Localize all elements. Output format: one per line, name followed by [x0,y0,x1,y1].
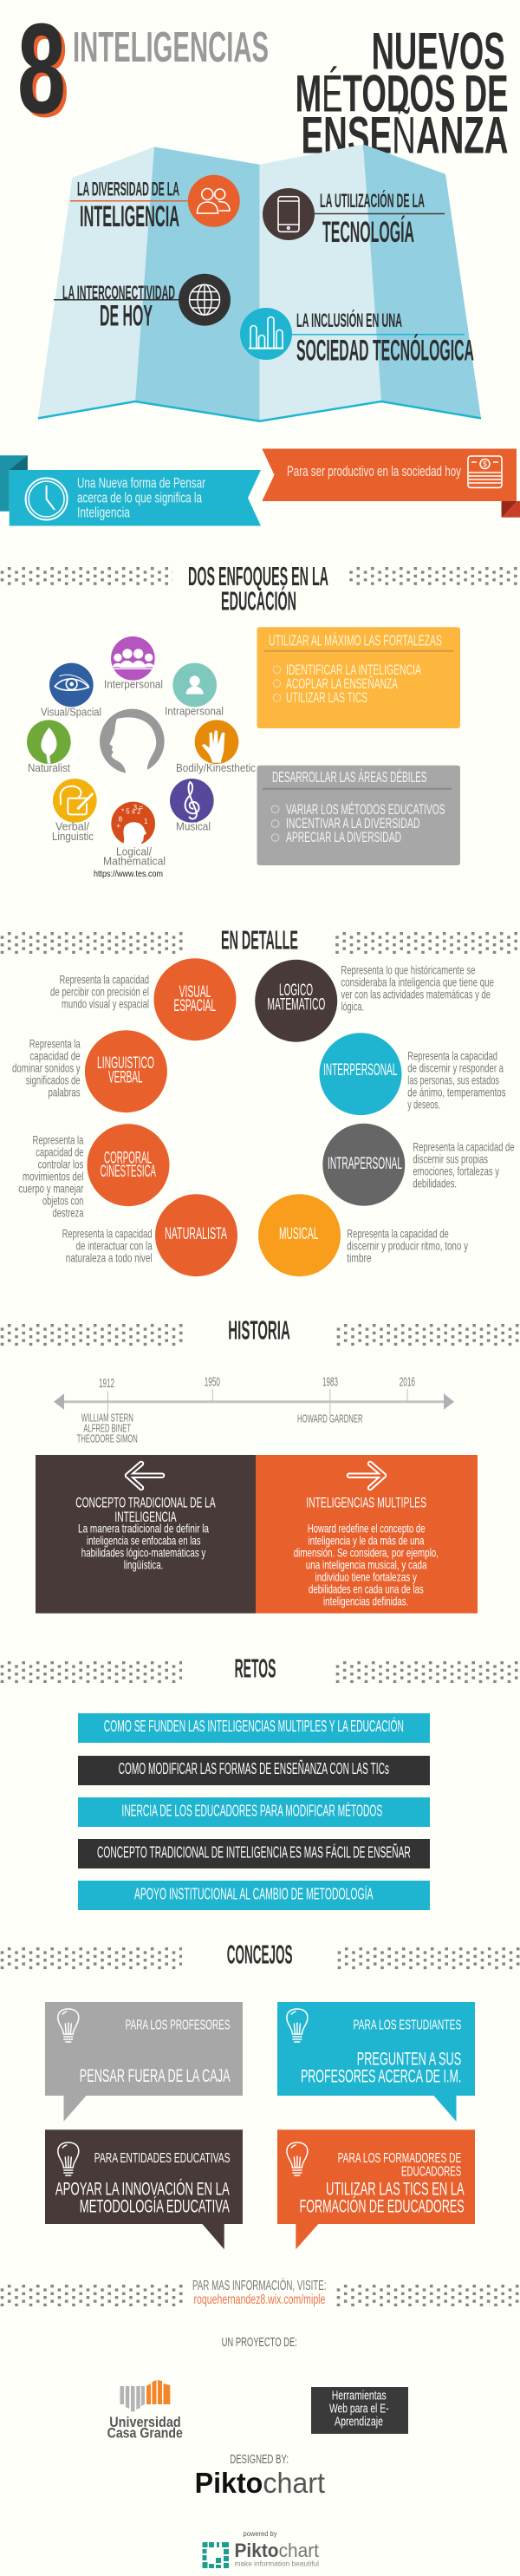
icon: bulb [287,2142,308,2175]
wheel labels: Bodily/Kinesthetic [176,761,256,774]
map item: la interconectividad de hoy: LA INTERCONECTIVIDAD [62,282,175,303]
icon: right arrow [349,1464,384,1488]
panel: inteligencias multiples: inteligencia y le da más de una [309,1533,425,1547]
wheel labels: Musical [176,820,211,833]
wheel labels: Naturalist [28,761,70,774]
section heading: historia [0,1314,520,1346]
panel: inteligencias multiples: individuo tiene fortalezas y [315,1569,417,1583]
text: designed by: DESIGNED BY: [230,2452,289,2467]
intelligence: corporal cinestesica: objetos con [42,1194,83,1208]
intelligence: linguistico verbal: significados de [26,1073,81,1087]
intelligence: musical: discernir y producir ritmo, tono y [347,1239,468,1253]
callout: para los profesores: PARA LOS PROFESORES [126,2018,231,2033]
map item: la diversidad de la inteligencia: INTELIGENCIA [80,200,179,233]
wheel labels [28,677,256,868]
logo: powered by piktochart: powered by [243,2530,277,2538]
intelligence: linguistico verbal: VERBAL [108,1068,142,1086]
section heading: en detalle: EN DETALLE [221,924,298,955]
panel: inteligencias multiples: debilidades en cada una de las [309,1581,424,1595]
intelligence: corporal cinestesica: controlar los [38,1158,83,1171]
icon: musical [170,779,214,823]
icon: left arrow [127,1464,162,1488]
panel: desarrollar las áreas débiles [257,766,460,865]
icon: visual spatial [49,663,94,707]
timeline: WILLIAM STERN [81,1412,133,1425]
icon: bodily [195,720,238,764]
challenge bar 5 [78,1881,430,1910]
intelligence: linguistico verbal: LINGUISTICO [97,1054,154,1073]
ribbon: una nueva forma de pensar [0,455,261,525]
intelligence: logico matematico: LOGICO [279,981,313,1000]
panel: utilizar al máximo las fortalezas: UTILIZAR LAS TICS [286,689,367,706]
folded map illustration [38,144,481,421]
intelligence: musical: MUSICAL [279,1225,318,1243]
intelligence: naturalista: Representa la capacidad [62,1227,153,1241]
logo: universidad casa grande: Universidad [109,2414,181,2430]
wheel labels: Linguistic [52,830,94,843]
panel: herramientas web para el e-aprendizaje: Herramientas [332,2388,387,2403]
wheel labels: Interpersonal [104,677,163,690]
icon: piktochart mark [203,2542,229,2568]
logo: powered by piktochart: make information beautiful [234,2560,319,2567]
text: un proyecto de: UN PROYECTO DE: [222,2335,297,2350]
footer: more information: roquehernandez8.wix.com/miple [194,2292,325,2307]
ribbon: una nueva forma de pensar: Una Nueva forma de Pensar [77,475,205,491]
panel: concepto tradicional: La manera tradicional de definir la [78,1521,209,1535]
callout: para entidades educativas: APOYAR LA INNOVACIÓN EN LA [55,2178,230,2200]
icon: logical [111,802,155,846]
icon: interpersonal [111,636,155,681]
timeline: 1950 [205,1375,220,1389]
ribbon: una nueva forma de pensar: Inteligencia [77,505,131,520]
wheel labels: Visual/Spacial [41,705,101,718]
panel: herramientas web para el e-aprendizaje: Aprendizaje [335,2414,383,2429]
wheel labels: Intrapersonal [165,705,224,718]
panel: concepto tradicional: CONCEPTO TRADICIONAL DE LA [75,1496,216,1511]
icon: banknote: $ [483,460,487,468]
callout: para entidades educativas: PARA ENTIDADES EDUCATIVAS [94,2151,231,2166]
panel: herramientas web para el e-aprendizaje: Web para el E- [329,2401,388,2416]
timeline [54,1375,454,1445]
callout: para los formadores de educadores [277,2129,475,2249]
panel: utilizar al máximo las fortalezas: ACOPLAR LA ENSEÑANZA [286,675,398,692]
panel: concepto tradicional: INTELIGENCIA [114,1510,177,1525]
timeline: 1912 [99,1377,114,1391]
timeline: THEODORE SIMON [77,1432,138,1445]
logo: piktochart: Piktochart [195,2467,325,2499]
panel: herramientas web para el e-aprendizaje [311,2387,408,2434]
callout: para los estudiantes: PARA LOS ESTUDIANTES [354,2018,461,2033]
intelligence: corporal cinestesica: destreza [52,1206,84,1220]
panel: concepto tradicional: habilidades lógico-matemáticas y [81,1545,205,1559]
intelligence: visual espacial: de percibir con precisión el [50,984,149,998]
wheel labels: Mathematical [103,855,166,868]
map item: la utilización de la tecnología: TECNOLOGÍA [322,214,414,249]
intelligence: musical: timbre [347,1251,372,1265]
intelligence: linguistico verbal: capacidad de [29,1049,81,1063]
icon: logical: 1 [144,818,148,825]
intelligence: naturalista [62,1194,237,1276]
intelligence: logico matematico [255,960,494,1042]
icon: bars [240,308,292,360]
panel: inteligencias multiples: una inteligencia musical, y cada [306,1557,427,1571]
panel: utilizar al máximo las fortalezas [257,627,460,728]
intelligence: logico matematico: lógica. [341,1000,364,1014]
intelligence: visual espacial: Representa la capacidad [59,972,149,986]
callout: para entidades educativas [45,2129,243,2249]
icon: globe [179,274,231,326]
intelligence: intrapersonal [322,1124,515,1206]
panel: inteligencias multiples: dimensión. Se considera, por ejemplo, [294,1545,439,1559]
intelligence: visual espacial: ESPACIAL [173,997,216,1015]
intelligence: naturalista: naturaleza a todo nivel [66,1251,153,1265]
section heading: concejos [0,1939,520,1970]
icon: intrapersonal [172,663,217,707]
icon: head [100,709,165,776]
footer: more information: PAR MAS INFORMACIÓN, VISITE: [192,2279,326,2293]
icon: logical: 8 [119,815,123,823]
logo: powered by piktochart [203,2530,319,2568]
challenge bar 2 [78,1756,430,1785]
intelligence: interpersonal [319,1033,506,1115]
intelligence: interpersonal: y deseos. [407,1098,440,1112]
map item: la interconectividad de hoy: DE HOY [100,300,153,333]
intelligence: corporal cinestesica: capacidad de [36,1145,84,1159]
title: 8 inteligencias [17,0,269,144]
intelligence: visual espacial [50,958,236,1040]
panel: concepto tradicional: lingüística. [124,1557,163,1571]
section heading: en detalle [0,924,520,955]
panel: desarrollar las áreas débiles: APRECIAR LA DIVERSIDAD [286,829,401,845]
icon: clock [26,479,68,520]
intelligence: linguistico verbal [12,1030,167,1112]
footer: more information [0,2279,520,2307]
intelligence: corporal cinestesica: cuerpo y manejar [18,1182,84,1196]
panel: concepto tradicional: inteligencia se enfocaba en las [87,1533,201,1547]
intelligence: musical: Representa la capacidad de [347,1227,449,1241]
callout: para los profesores: PENSAR FUERA DE LA CAJA [80,2065,231,2086]
map item: la utilización de la tecnología [263,188,445,249]
section heading: dos enfoques en la educación: EDUCACIÓN [221,584,296,616]
intelligence: linguistico verbal: palabras [49,1086,81,1099]
numeral 8 with orange shadow: 8 [17,0,66,140]
callout: para entidades educativas: METODOLOGÍA EDUCATIVA [80,2195,230,2217]
map item: la interconectividad de hoy [54,274,231,333]
ribbon: una nueva forma de pensar: acerca de lo que significa la [77,491,203,506]
panel: desarrollar las áreas débiles: INCENTIVAR A LA DIVERSIDAD [286,815,419,831]
section heading: retos: RETOS [235,1653,276,1683]
callout: para los profesores [45,2002,243,2122]
panel: inteligencias multiples [256,1455,478,1614]
challenge bar 3 [78,1797,430,1827]
panel: concepto tradicional [36,1455,256,1614]
icon: naturalist [27,720,71,764]
intelligence: naturalista: de interactuar con la [76,1239,153,1253]
intelligence: linguistico verbal: dominar sonidos y [12,1061,81,1075]
timeline: ALFRED BINET [83,1422,131,1435]
logo: powered by piktochart: Piktochart [234,2540,319,2561]
panel: inteligencias multiples: INTELIGENCIAS MULTIPLES [306,1496,426,1511]
challenge bar 1 [78,1713,430,1743]
callout: para los estudiantes [277,2002,475,2122]
title: nuevos métodos de enseñanza [296,23,509,164]
map item: la inclusión en una sociedad tecnológica: LA INCLUSIÓN EN UNA [296,310,402,331]
intelligence: naturalista: NATURALISTA [165,1225,227,1243]
intelligence: musical [258,1194,468,1276]
callout: para los formadores de educadores: EDUCADORES [401,2164,461,2179]
logo: universidad casa grande: Casa Grande [107,2425,183,2442]
wheel labels: Verbal/ [55,819,89,832]
map item: la diversidad de la inteligencia [70,175,240,233]
intelligence: corporal cinestesica: CINESTESICA [101,1163,156,1181]
intelligence: logico matematico: MATEMATICO [267,995,325,1014]
intelligence: intrapersonal: INTRAPERSONAL [328,1155,402,1173]
intelligence: visual espacial: mundo visual y espacial [62,996,149,1010]
challenge bar 4 [78,1839,430,1868]
icon: logical: 3 = [133,804,143,812]
icon: people [188,175,240,227]
icon: bulb [58,2142,79,2175]
intelligence: corporal cinestesica: movimientos del [23,1170,83,1184]
intelligence: corporal cinestesica: CORPORAL [104,1150,152,1168]
section heading: dos enfoques en la educación [0,561,520,616]
icon: bulb [287,2009,308,2042]
intelligence: corporal cinestesica: Representa la [33,1133,84,1147]
intelligence: interpersonal: INTERPERSONAL [323,1061,397,1079]
word: inteligencias: INTELIGENCIAS [73,24,269,71]
numeral 8 with orange shadow: 8 [21,1,69,144]
icons drawn in a scaled group [27,636,238,846]
chart: eight intelligences wheel [27,636,256,879]
logo: universidad casa grande [107,2380,183,2442]
panel: inteligencias multiples: Howard redefine el concepto de [308,1521,426,1535]
intelligence: corporal cinestesica [18,1124,170,1220]
icon: logical: + [116,822,120,830]
timeline: 2016 [400,1375,415,1389]
panel: utilizar al máximo las fortalezas: IDENTIFICAR LA INTELIGENCIA [286,662,421,678]
source url: https://www.tes.com [94,870,163,879]
intelligence: intrapersonal: debilidades. [413,1177,457,1190]
wheel labels: Logical/ [116,845,152,858]
icon: logical: * 5 x 2 [121,807,141,815]
icon: phone [263,188,315,240]
panel: inteligencias multiples: inteligencias definidas. [323,1594,408,1608]
map item: la inclusión en una sociedad tecnológica [240,308,474,368]
map item: la diversidad de la inteligencia: LA DIVERSIDAD DE LA [77,179,179,200]
timeline: HOWARD GARDNER [297,1412,363,1425]
timeline: 1983 [322,1375,338,1389]
intelligence: linguistico verbal: Representa la [29,1037,81,1051]
section heading: concejos: CONCEJOS [227,1939,293,1969]
section heading: retos [0,1653,520,1683]
icon: verbal [53,779,97,823]
ribbon: para ser productivo [262,449,520,518]
section heading: historia: HISTORIA [228,1314,290,1345]
icon: bulb [58,2009,79,2042]
section heading: dos enfoques en la educación: DOS ENFOQUES EN LA [188,561,328,591]
intelligence: visual espacial: VISUAL [179,983,211,1001]
icon: banknote [468,456,502,487]
